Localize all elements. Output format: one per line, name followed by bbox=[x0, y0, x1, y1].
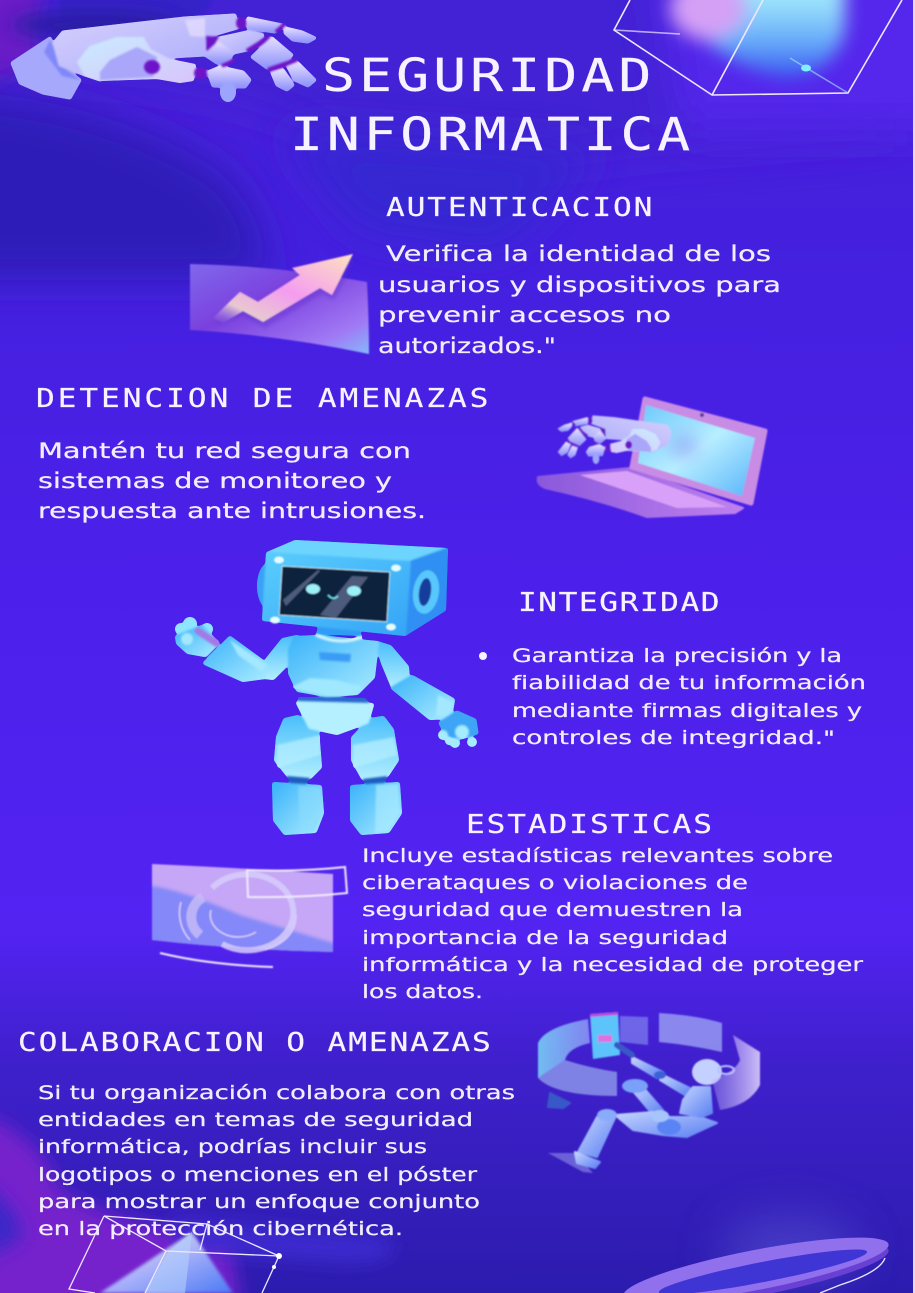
text: autenticacion bbox=[378, 242, 781, 358]
text: autenticacion: prevenir accesos no bbox=[378, 303, 671, 327]
text: detencion de amenazas: Mantén tu red segura con bbox=[38, 439, 411, 463]
icon: wireframe cube with prism bbox=[69, 1216, 282, 1293]
robot right arm bbox=[377, 643, 477, 748]
text: detencion de amenazas: respuesta ante intrusiones. bbox=[38, 499, 426, 523]
icon: robot hand top left bbox=[12, 15, 315, 102]
title: SEGURIDAD bbox=[322, 49, 651, 102]
text: integridad: fiabilidad de tu información bbox=[512, 672, 866, 694]
text: detencion de amenazas bbox=[38, 439, 426, 523]
text: autenticacion: Verifica la identidad de los bbox=[386, 242, 771, 266]
heading: estadisticas: ESTADISTICAS bbox=[466, 809, 712, 839]
icon: holographic panel bbox=[140, 864, 347, 967]
icon: laptop with robot hand bbox=[538, 399, 765, 517]
text: colaboracion: entidades en temas de seguridad bbox=[38, 1109, 473, 1131]
heading: colaboracion o amenazas: COLABORACION O AMENAZAS bbox=[18, 1027, 491, 1057]
text: colaboracion: para mostrar un enfoque conjunto bbox=[38, 1191, 480, 1213]
text: estadisticas bbox=[362, 845, 863, 1003]
text: estadisticas: seguridad que demuestren la bbox=[362, 899, 743, 921]
icon: chart panel with rising arrow bbox=[190, 254, 369, 354]
text: estadisticas: ciberataques o violaciones de bbox=[362, 872, 748, 894]
text: autenticacion: autorizados." bbox=[378, 334, 556, 358]
text: integridad: mediante firmas digitales y bbox=[512, 700, 862, 722]
icon: glowing cube top right bbox=[614, 0, 902, 95]
text: colaboracion: en la protección cibernética. bbox=[38, 1218, 403, 1240]
text: colaboracion: informática, podrías incluir sus bbox=[38, 1136, 427, 1158]
text: autenticacion: usuarios y dispositivos para bbox=[378, 273, 781, 297]
illustration: blue robot bbox=[175, 541, 477, 833]
title bbox=[290, 49, 690, 161]
robot face bbox=[270, 556, 442, 630]
text: estadisticas: importancia de la seguridad bbox=[362, 927, 728, 949]
text: integridad bbox=[479, 645, 866, 749]
icon: floating ring bbox=[620, 1215, 892, 1293]
robot left arm bbox=[175, 617, 297, 680]
robot torso bbox=[290, 620, 377, 733]
text: estadisticas: Incluye estadísticas relevantes sobre bbox=[362, 845, 833, 867]
robot head shell bbox=[257, 541, 447, 635]
text: estadisticas: los datos. bbox=[362, 981, 483, 1003]
heading: detencion de amenazas: DETENCION DE AMENAZAS bbox=[36, 383, 488, 413]
illustration: robot with holographic ring bbox=[538, 1012, 760, 1173]
text: colaboracion bbox=[38, 1082, 515, 1240]
robot legs bbox=[274, 717, 400, 833]
text: colaboracion: Si tu organización colabora con otras bbox=[38, 1082, 515, 1104]
text: integridad: Garantiza la precisión y la bbox=[512, 645, 842, 667]
heading: integridad: INTEGRIDAD bbox=[518, 587, 720, 617]
heading: autenticacion: AUTENTICACION bbox=[386, 192, 652, 222]
text: detencion de amenazas: sistemas de monitoreo y bbox=[38, 469, 392, 493]
text: integridad: controles de integridad." bbox=[512, 727, 835, 749]
text: estadisticas: informática y la necesidad de proteger bbox=[362, 954, 863, 976]
title: INFORMATICA bbox=[290, 108, 690, 161]
text: colaboracion: logotipos o menciones en el póster bbox=[38, 1164, 477, 1186]
